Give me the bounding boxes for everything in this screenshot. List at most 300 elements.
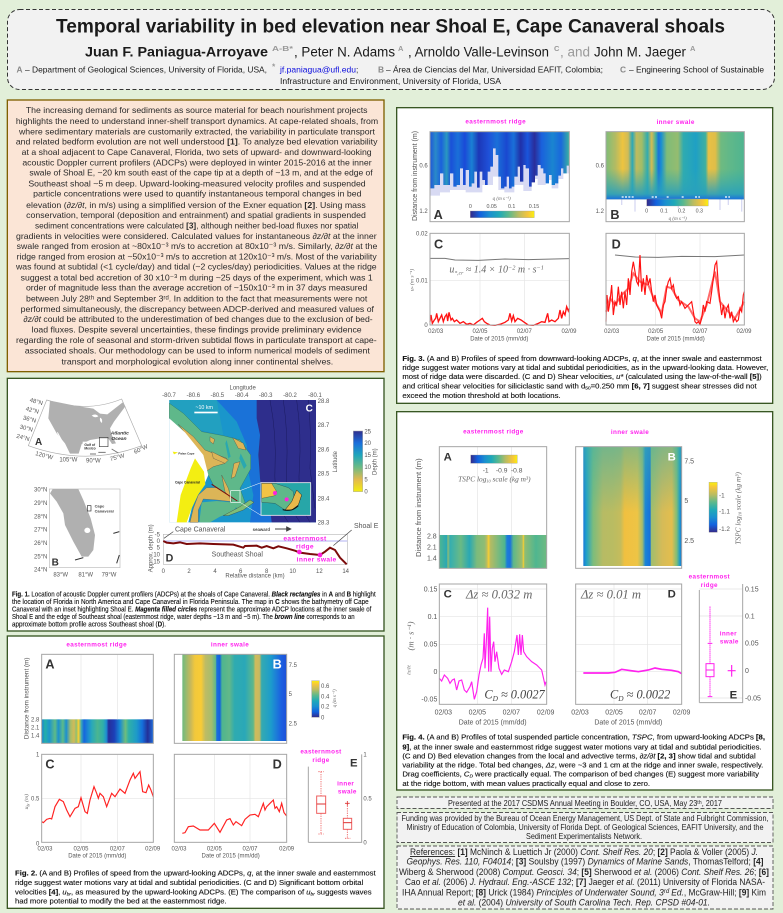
chart B: speed profile swale: B <box>610 208 619 222</box>
chart C: orbital velocity ridge: br <box>26 803 30 807</box>
colorbar: speed: 0.4 <box>321 695 330 701</box>
chart D: shear velocity swale: 02/05 <box>648 329 664 335</box>
panel D: bottom profile: Relative distance (km) <box>225 574 285 580</box>
colorbar: depth: 25 <box>364 430 372 436</box>
panel D: bottom profile: 10 <box>289 569 297 575</box>
chart A: TSPC ridge: -0.8 <box>511 467 523 474</box>
chart C: bed change ridge: 0.15 <box>424 586 437 593</box>
caption: figure 2 <box>15 871 376 905</box>
chart C: bed change ridge: ∂z/∂t <box>407 665 413 675</box>
panel: abstract: elevation (∂z/∂t, in m/s) using a simplified version of the Exner equation [2]. Using mass <box>26 200 367 210</box>
chart E: bed change boxplots: -0.05 <box>745 695 761 702</box>
chart C: shear velocity ridge: 0.02 <box>416 231 428 237</box>
caption: figure 3: and critical shear velocities for siliciclastic sand with d <box>402 383 568 390</box>
colorbar: depth: Depth (m) <box>373 448 379 475</box>
colorbar: swale speed: 0.3 <box>696 209 703 215</box>
chart D: shear velocity swale: D <box>612 237 621 251</box>
chart E: bed change boxplots: swale <box>720 639 739 646</box>
colorbar: ridge speed: q (m s⁻¹) <box>493 196 511 202</box>
affiliations: jf.paniagua@ufl.edu <box>279 64 356 74</box>
map C: bathymetry: 28.7 <box>318 423 330 429</box>
colorbar: swale speed <box>645 199 708 222</box>
affiliations: – Área de Ciencias del Mar, Universidad EAFIT, Colombia; <box>386 64 603 74</box>
chart D: bed change swale: Date of 2015 (mm/dd) <box>594 719 662 726</box>
colorbar: speed <box>312 681 338 721</box>
caption: figure 2: Fig. 2. (A and B) Profiles of speed from the upward-looking ADCPs, q, at the inner swale and easternmost <box>15 871 376 878</box>
map C: bathymetry <box>162 386 339 527</box>
chart A: TSPC ridge: 1.4 <box>427 556 437 563</box>
map A: North America: 24°N <box>15 434 30 443</box>
colorbar: speed: 0.6 <box>321 684 330 690</box>
panel D: bottom profile: 14 <box>342 569 350 575</box>
panel: abstract: and related bedform evolution are not well understood [1]. To analyze bed elevation variability <box>16 137 378 147</box>
colorbar: depth <box>353 430 379 496</box>
panel: abstract: particle concentrations were used to quantify instantaneous temporal changes in bed <box>33 189 362 199</box>
map C: bathymetry: Longitude <box>230 386 256 392</box>
caption: figure 4: Fig. 4. (A and B) Profiles of total suspended particle concentration, TSPC, from upward-looking ADCPs [8, <box>402 735 765 742</box>
chart C: orbital velocity ridge: 02/07 <box>110 846 125 852</box>
affiliations: C <box>620 64 626 74</box>
heading: inner swale: inner swale <box>211 641 249 648</box>
chart B: speed profile swale: 5 <box>289 692 293 698</box>
caption: figure 3: ridge suggest water motions vary at tidal and subtidal periodicities, as in the upward-looking data. However, <box>402 365 768 372</box>
chart D: bed change swale: D <box>668 589 676 601</box>
chart C: orbital velocity ridge: 0 <box>36 841 40 847</box>
caption: figure 3: 50 <box>585 385 591 390</box>
caption: figure 4: variability at the ridge. Total bed changes, Δz, were ~3 and 1 cm at the ridge and inner swale, respectively. <box>402 762 763 769</box>
chart C: shear velocity ridge: −2 <box>508 264 516 271</box>
chart C: shear velocity ridge: m · s <box>515 265 537 276</box>
map A: North America <box>15 398 149 465</box>
chart C: bed change ridge: 0 <box>433 669 437 676</box>
panel D: bottom profile: 12 <box>316 569 323 575</box>
chart A: TSPC ridge: 2.8 <box>427 534 437 541</box>
panel: abstract: performed simultaneously, the discrepancy between ADCP-derived and measured values of <box>21 304 375 314</box>
chart A: TSPC ridge: A <box>444 451 452 463</box>
chart C: bed change ridge: -0.05 <box>421 697 437 704</box>
authors: A <box>398 44 404 53</box>
caption: figure 2: br <box>311 891 315 896</box>
chart C: shear velocity ridge: Date of 2015 (mm/dd) <box>470 337 528 343</box>
chart C: shear velocity ridge <box>408 231 577 343</box>
chart A: TSPC ridge: scale (kg m³) <box>491 474 531 483</box>
chart C: bed change ridge: 02/03 <box>435 710 452 717</box>
affiliations: ; <box>356 64 358 74</box>
caption: figure 4: at the ridge bottom, with mean values practically equal and close to zero. <box>402 781 650 788</box>
panel D: bottom profile: 10 <box>153 552 161 558</box>
header panel <box>8 10 774 90</box>
affiliations: A <box>16 64 23 74</box>
chart E: boxplots: E <box>350 758 358 770</box>
caption: figure 1: Canaveral with an inset highlighting Shoal E. Magenta filled circles represent the approximate ADCP locations at the inner swale of <box>12 606 371 613</box>
authors: , Arnoldo Valle-Levinson <box>408 44 549 60</box>
chart C: bed change ridge: 0.05 <box>424 642 437 649</box>
chart A: speed profile ridge: Distance from instrument (m) <box>412 131 419 221</box>
colorbar: TSPC: TSPC log <box>733 516 742 545</box>
panel: abstract: highlights the need to understand inner-shelf transport dynamics. At cape-related shoals, from <box>16 116 378 126</box>
chart C: shear velocity ridge: 02/09 <box>562 329 577 335</box>
chart C: shear velocity ridge: 02/05 <box>473 329 488 335</box>
map B: Florida <box>34 488 120 578</box>
colorbar: speed: 0.2 <box>321 705 330 711</box>
chart D: bed change swale: 02/09 <box>673 710 691 717</box>
chart E: boxplots <box>300 749 372 846</box>
map C: bathymetry: -80.2 <box>283 393 297 399</box>
caption: figure 4: Drag coefficients, C <box>402 771 469 778</box>
map C: bathymetry: -80.6 <box>187 393 201 399</box>
chart B: speed profile swale: 0.6 <box>596 164 605 170</box>
chart C: shear velocity ridge: 02/07 <box>517 329 532 335</box>
colorbar: depth: 15 <box>364 453 372 459</box>
chart B: speed profile swale <box>174 654 298 743</box>
chart E: bed change boxplots: 0 <box>745 668 749 675</box>
caption: figure 1: approximate bottom profile across Southeast shoal (D). <box>12 622 166 629</box>
chart C: bed change ridge: C <box>444 589 452 601</box>
caption: figure 2: br <box>67 891 72 896</box>
colorbar: TSPC: scale (kg m³) <box>733 472 742 512</box>
panel D: bottom profile: Shoal E <box>354 523 379 530</box>
panel D: bottom profile: -5 <box>155 532 161 538</box>
chart C: orbital velocity ridge: 02/03 <box>38 846 53 852</box>
references: IHA Annual Report; [8] Urick (1984) Principles of Underwater Sound, 3ʳᵈ Ed., McGraw-Hill; [9] Kim <box>402 888 766 898</box>
map B: Florida: 26°N <box>34 541 47 547</box>
chart E: bed change boxplots: easternmost <box>689 574 731 581</box>
map A: North America: Atlantic <box>110 430 129 436</box>
colorbar: swale speed: q (m s⁻¹) <box>669 216 687 222</box>
panel: abstract: gradients in velocities were considered. Calculated values for instantaneous ∂z/∂t at the inner <box>16 231 377 241</box>
chart C: orbital velocity ridge: Date of 2015 (mm/dd) <box>68 854 126 860</box>
funding note: Sediment Experimentalists Network. <box>526 832 642 841</box>
map C: bathymetry: ~10 km <box>195 405 214 411</box>
chart E: bed change boxplots: 0.1 <box>745 613 755 620</box>
panel D: bottom profile <box>149 523 379 580</box>
chart C: orbital velocity ridge: C <box>45 757 54 771</box>
references <box>397 846 773 909</box>
authors: A <box>690 44 696 53</box>
map B: Florida: 79°W <box>102 572 117 578</box>
panel: abstract: acoustic Doppler current profilers (ADCPs) were deployed in winter 2015-2016 at the inner <box>22 157 372 167</box>
colorbar: TSPC: -1 <box>719 493 725 500</box>
chart A: TSPC ridge <box>414 447 547 568</box>
chart D: shear velocity swale: 02/07 <box>693 329 708 335</box>
authors: A-B* <box>272 44 293 53</box>
map A: North America: Ocean <box>111 436 127 442</box>
colorbar: ridge speed: 0.15 <box>529 204 539 210</box>
chart B: speed profile swale <box>596 132 744 222</box>
chart C: shear velocity ridge: 0 <box>424 323 428 329</box>
chart A: speed profile ridge <box>24 654 153 743</box>
chart C: shear velocity ridge: 02/03 <box>428 329 444 335</box>
chart D: shear velocity swale <box>604 233 752 343</box>
map C: bathymetry: 28.3 <box>318 521 330 527</box>
panel D: bottom profile: D <box>166 553 174 565</box>
caption: figure 2: velocities [4], u <box>15 889 66 896</box>
panel: abstract: between July 28ᵗʰ and September 3ʳᵈ. In addition to the fact that measurements were not <box>26 293 368 303</box>
caption: figure 3: most of ridge data were discarded. (C and D) Shear velocities, u* (calculated using the law-of-the-wall [5]) <box>402 374 762 381</box>
chart E: boxplots: 1 <box>363 752 367 758</box>
chart D: bed change swale: 02/05 <box>605 710 623 717</box>
presented-at note: Presented at the 2017 CSDMS Annual Meeting in Boulder, CO, USA, May 23ᵗʰ, 2017 <box>448 799 722 808</box>
colorbar: depth: 5 <box>364 477 368 483</box>
chart C: bed change ridge: Δz ≈ 0.032 m <box>465 588 532 602</box>
chart A: speed profile ridge: A <box>45 657 54 671</box>
chart C: bed change ridge: 02/05 <box>469 710 486 717</box>
map A: North America: 42°N <box>25 406 39 416</box>
chart D: orbital velocity swale: 02/09 <box>279 846 295 852</box>
chart A: TSPC ridge: -1 <box>483 467 489 474</box>
chart A: speed profile ridge: A <box>434 208 443 222</box>
chart D: bed change swale <box>571 584 691 726</box>
colorbar: swale speed: 0.1 <box>660 209 668 215</box>
references: et al. (2004) University of South Carolina Tech. Rep. CPSD #04-01. <box>458 898 710 908</box>
map A: North America: 120°W <box>34 451 54 462</box>
chart D: orbital velocity swale <box>172 754 295 860</box>
map B: Florida: 27°N <box>34 528 47 534</box>
map B: Florida: Canaveral <box>95 508 114 513</box>
chart C: bed change ridge <box>406 584 555 726</box>
panel D: bottom profile: easternmost <box>283 536 327 543</box>
chart C: bed change ridge: Date of 2015 (mm/dd) <box>459 719 527 726</box>
chart E: bed change boxplots: ridge <box>701 582 718 589</box>
chart C: orbital velocity ridge <box>23 752 161 860</box>
chart C: orbital velocity ridge: u <box>24 807 30 809</box>
chart C: bed change ridge: 02/09 <box>537 710 555 717</box>
heading: easternmost ridge: easternmost ridge <box>465 119 526 126</box>
references: References: [1] McNinch & Luettich Jr (2000) Cont. Shelf Res. 20; [2] Paola & Voller (2005) J. <box>410 847 758 857</box>
chart B: speed profile swale: B <box>273 657 282 671</box>
caption: figure 2: had more potential to modify the bed at the easternmost ridge. <box>15 898 227 905</box>
chart A: TSPC ridge: TSPC log <box>458 474 486 483</box>
panel: figure 3 downward-looking ADCPs <box>397 108 773 403</box>
colorbar: speed: 0 <box>321 715 325 721</box>
map A: North America: 105°W <box>59 458 78 464</box>
map A: North America: 90°W <box>86 459 101 465</box>
affiliations: – Engineering School of Sustainable <box>629 64 764 74</box>
colorbar: swale speed: 0 <box>645 209 648 215</box>
caption: figure 2: , as measured by the upward-looking ADCPs. (E) The comparison of <box>71 889 306 896</box>
chart A: speed profile ridge: 0.6 <box>419 164 428 170</box>
chart C: orbital velocity ridge: 1 <box>36 752 40 758</box>
chart E: boxplots: 0.5 <box>363 796 372 802</box>
panel: abstract: ∂z/∂t could be attributed to the underestimation of bed changes due to the exclusion of bed- <box>23 314 373 324</box>
chart A: speed profile ridge: 1.4 <box>31 734 40 740</box>
map A: North America: 60°W <box>133 444 149 456</box>
references: Wiberg & Sherwood (2008) Comput. Geosci. 34; [5] Sherwood et al. (2006) Cont. Shelf Res. 26; [6] <box>399 867 769 877</box>
colorbar: TSPC: -1.1 <box>719 509 730 516</box>
caption: figure 1: the location of Florida in North America and Cape Canaveral in Florida Peninsula. The map in C shows the bathymetry off Cape <box>12 599 369 606</box>
chart A: TSPC ridge: Distance from instrument (m) <box>414 458 423 557</box>
colorbar: TSPC: 10 <box>738 511 743 516</box>
panel D: bottom profile: 6 <box>239 569 243 575</box>
chart D: orbital velocity swale: Date of 2015 (mm/dd) <box>202 854 260 860</box>
heading: inner swale: inner swale <box>657 119 695 126</box>
heading: easternmost ridge: easternmost ridge <box>463 429 524 436</box>
panel D: bottom profile: 0 <box>157 539 161 545</box>
panel D: bottom profile: Southeast Shoal <box>212 551 263 558</box>
chart C: shear velocity ridge: −1 <box>537 264 544 271</box>
chart B: TSPC swale: B <box>668 451 676 463</box>
panel: abstract: swale of Shoal E, ~20 km south east of the cape tip at a depth of ~13 m, and at the edge of <box>29 168 373 178</box>
chart B: TSPC swale: 2.5 <box>684 538 694 545</box>
panel: abstract: order of magnitude less than the average accretion of ~150x10⁻³ m in 37 days measured <box>26 283 368 293</box>
chart A: speed profile ridge: 2.1 <box>31 726 40 732</box>
chart C: bed change ridge: 0.1 <box>428 614 437 621</box>
panel: abstract: regarding the role of seasonal and storm-driven subtidal flows in particulate transport at cape- <box>16 335 377 345</box>
panel D: bottom profile: inner swale <box>297 557 337 564</box>
authors: John M. Jaeger <box>594 44 686 60</box>
panel: abstract: The increasing demand for sediments as source material for beach nourishment projects <box>26 105 368 115</box>
affiliations: * <box>272 62 276 72</box>
panel: abstract: suggest a total bed accretion of 30 x10⁻³ m during ~25 days of the experiment, which was 1 <box>21 272 373 282</box>
map A: North America: 30°N <box>19 424 33 434</box>
caption: figure 3: exceed the motion threshold at both locations. <box>402 393 561 400</box>
references: Geophys. Res. 110, F04014; [3] Soulsby (1997) Dynamics of Marine Sands, ThomasTelford; [4] <box>406 856 764 866</box>
panel: abstract: load fluxes. Despite several uncertainties, these findings provide preliminary evidence <box>32 324 362 334</box>
map C: bathymetry: -80.5 <box>211 393 225 399</box>
panel D: bottom profile: 5 <box>157 546 161 552</box>
panel: abstract: ridge ranged from erosion at ~50x10⁻³ m/s to accretion at 120x10⁻³ m/s. Most of the variability <box>17 252 377 262</box>
funding note <box>397 812 773 842</box>
authors: C <box>554 44 560 53</box>
chart E: boxplots: easternmost <box>300 749 342 756</box>
panel: figure 2 wave orbital velocities <box>7 636 384 908</box>
chart B: TSPC swale: 7.5 <box>684 458 694 465</box>
chart C: orbital velocity ridge: 0.5 <box>31 796 40 802</box>
colorbar: ridge speed: 0 <box>469 204 472 210</box>
caption: figure 1 <box>12 592 376 629</box>
map C: bathymetry: 28.8 <box>318 399 330 405</box>
chart D: bed change swale: Δz ≈ 0.01 m <box>580 588 641 602</box>
chart E: bed change boxplots: 0.05 <box>745 641 759 648</box>
chart C: orbital velocity ridge: 02/05 <box>74 846 89 852</box>
caption: figure 4: 9], at the inner swale and easternmost ridge suggest water motions vary at tidal and subtidal periodicities. <box>402 744 762 751</box>
map C: bathymetry: 28.6 <box>318 447 330 453</box>
chart D: orbital velocity swale: 02/05 <box>207 846 222 852</box>
panel: abstract: conservation, temporal (deposition and entrainment) and spatial gradients in suspended <box>26 210 366 220</box>
chart D: shear velocity swale: 02/03 <box>604 329 620 335</box>
chart B: speed profile swale: 2.5 <box>289 721 298 727</box>
affiliations: B <box>378 64 384 74</box>
chart D: bed change swale: D <box>617 694 624 703</box>
caption: figure 4 <box>402 735 765 788</box>
authors: , Peter N. Adams <box>294 44 395 60</box>
chart A: speed profile ridge: Distance from instrument (m) <box>24 658 31 739</box>
chart D: orbital velocity swale: 02/07 <box>243 846 258 852</box>
authors <box>85 44 696 60</box>
chart E: boxplots: ridge <box>312 757 330 764</box>
map C: bathymetry: C <box>306 404 313 415</box>
chart C: shear velocity ridge: ≈ 1.4 × 10 <box>463 265 508 276</box>
map A: North America: Mexico <box>84 447 96 451</box>
caption: figure 2: ridge suggest water motions vary at tidal and subtidal periodicities. (C and D) Significant bottom orbital <box>15 880 364 887</box>
colorbar: TSPC: -1.2 <box>719 526 730 533</box>
caption: figure 1: Fig. 1. Location of acoustic Doppler current profilers (ADCPs) at the shoals of Cape Canaveral. Black rectangles in A and B highlight <box>12 592 376 599</box>
caption: figure 4: (C and D) Bed elevation changes from the local and advective terms, ∂z/∂t [2, 3] show tidal and subtidal <box>402 753 756 760</box>
panel: abstract: at a shoal adjacent to Cape Canaveral, Florida, two sets of upward- and downward-looking <box>22 147 372 157</box>
chart A: TSPC ridge: 2.1 <box>427 545 437 552</box>
chart D: bed change swale: 02/03 <box>571 710 589 717</box>
chart C: orbital velocity ridge: (m) <box>23 794 30 803</box>
chart C: bed change ridge: (m · s⁻¹) <box>406 621 416 651</box>
chart C: bed change ridge: D <box>492 694 499 703</box>
affiliations: – Department of Geological Sciences, University of Florida, USA, <box>25 64 267 74</box>
map B: Florida: B <box>52 558 59 569</box>
panel: abstract: transport and morphological evolution along inner continental shelves. <box>61 357 333 367</box>
map A: North America: 36°N <box>22 415 37 425</box>
map B: Florida: 29°N <box>34 501 47 507</box>
panel: abstract: associated shoals. Our methodology can be used to inform numerical models of sediment <box>25 346 370 356</box>
caption: figure 3: =0.250 mm <box>591 383 632 390</box>
map B: Florida: 28°N <box>34 514 47 520</box>
map A: North America: Gulf of <box>84 443 96 447</box>
heading: easternmost ridge: easternmost ridge <box>66 641 127 648</box>
colorbar: swale speed: 0.2 <box>678 209 685 215</box>
map C: bathymetry: -80.7 <box>162 393 176 399</box>
panel D: bottom profile: 15 <box>153 560 161 566</box>
map C: bathymetry: -80.1 <box>308 393 322 399</box>
caption: figure 3 <box>402 356 768 400</box>
map B: Florida: 83°W <box>53 572 68 578</box>
caption: figure 3: [6, 7] suggest shear stresses did not <box>632 383 746 390</box>
caption: figure 4: D <box>469 773 473 778</box>
chart B: TSPC swale <box>576 447 694 568</box>
map A: North America: 75°W <box>110 453 126 463</box>
chart C: shear velocity ridge: u <box>449 265 454 276</box>
panel: abstract: where sedimentary materials are customarily extracted, the variability in particulate transport <box>18 126 376 136</box>
colorbar: ridge speed <box>469 196 539 218</box>
chart A: speed profile ridge: 2.8 <box>31 718 40 724</box>
panel D: bottom profile: Approx. depth (m) <box>149 524 155 572</box>
chart C: shear velocity ridge: (m s⁻¹) <box>408 269 415 286</box>
panel D: bottom profile: 4 <box>213 569 217 575</box>
chart D: shear velocity swale: Date of 2015 (mm/dd) <box>647 337 705 343</box>
chart A: TSPC ridge: -0.9 <box>496 467 508 474</box>
panel D: bottom profile: Cape Canaveral <box>175 526 226 533</box>
colorbar: depth: 10 <box>364 465 372 471</box>
chart E: boxplots: inner <box>337 781 354 788</box>
chart D: bed change swale: C <box>610 688 618 702</box>
chart E: bed change boxplots: 0.15 <box>745 586 759 593</box>
colorbar: ridge speed: 0.1 <box>508 204 515 210</box>
chart E: bed change boxplots <box>689 574 761 703</box>
map C: bathymetry: 28.4 <box>318 496 330 502</box>
chart D: orbital velocity swale: 02/03 <box>172 846 187 852</box>
chart E: boxplots: swale <box>338 789 357 796</box>
caption: figure 2: u <box>306 889 315 896</box>
map C: bathymetry: 28.5 <box>318 472 330 478</box>
caption: figure 4: were practically equal. The comparison of bed changes (E) suggest more variability <box>473 771 760 778</box>
colorbar: TSPC <box>709 472 743 545</box>
affiliations <box>16 62 764 86</box>
map C: bathymetry: Cape Canaveral <box>175 481 200 485</box>
colorbar: depth: 20 <box>364 441 372 447</box>
map B: Florida: Cape <box>95 504 105 509</box>
title: Temporal variability in bed elevation near Shoal E, Cape Canaveral shoals <box>56 16 725 38</box>
chart E: boxplots: 0 <box>363 840 367 846</box>
chart D: shear velocity swale: 02/09 <box>737 329 752 335</box>
map C: bathymetry: Latitude <box>333 450 339 472</box>
map B: Florida: 24°N <box>34 568 47 574</box>
chart D: bed change swale: ≈ 0.0022 <box>624 688 670 702</box>
chart A: speed profile ridge <box>412 131 569 222</box>
panel D: bottom profile: seaward <box>253 527 270 532</box>
references: Cao et al. (2006) J. Hydraul. Eng.-ASCE 132; [7] Jaeger et al. (2011) University of Florida NASA- <box>405 877 765 887</box>
authors: Juan F. Paniagua-Arroyave <box>85 44 269 60</box>
chart C: bed change ridge: C <box>484 688 493 702</box>
authors: , and <box>560 44 590 60</box>
chart E: bed change boxplots: inner <box>720 631 737 638</box>
heading: inner swale: inner swale <box>611 429 649 436</box>
